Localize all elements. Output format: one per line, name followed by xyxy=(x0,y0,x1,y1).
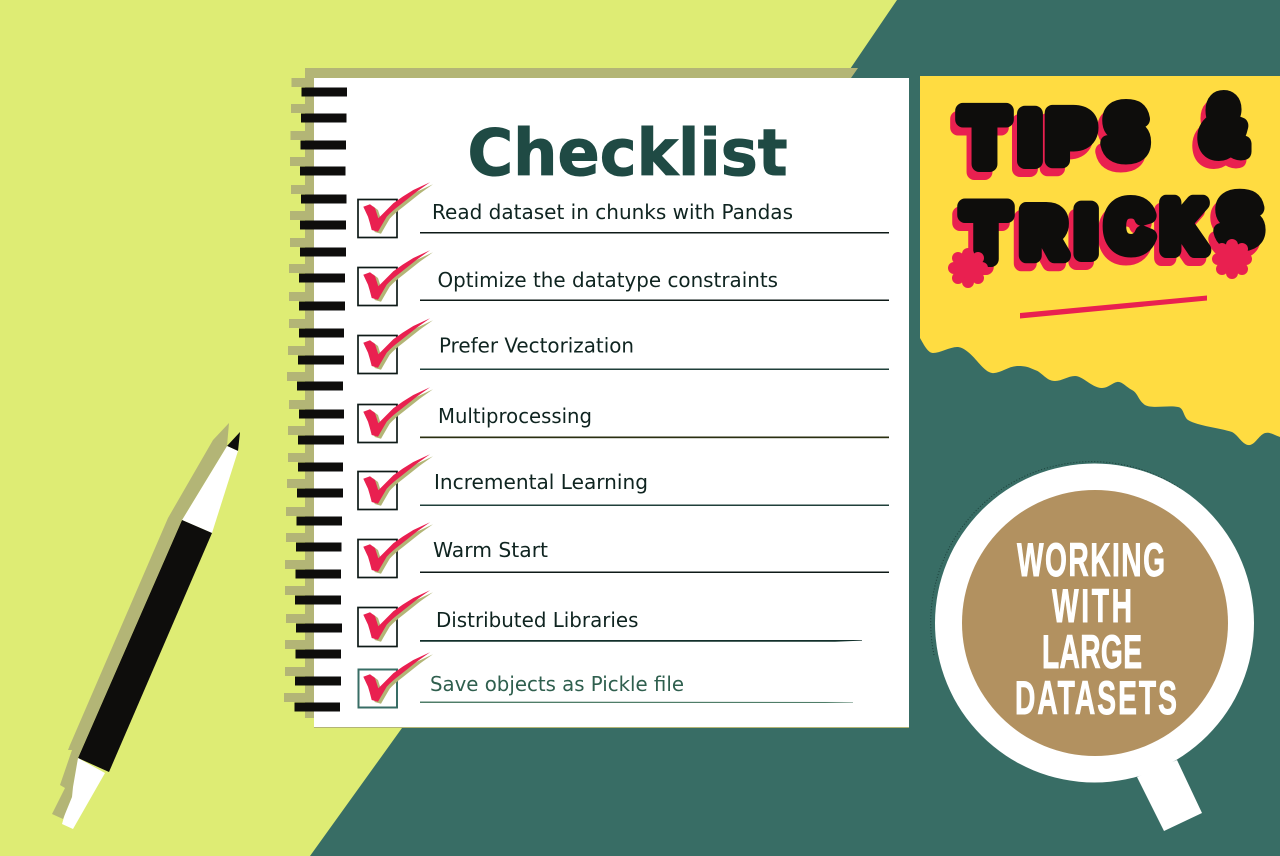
brown lens xyxy=(962,490,1228,756)
torn yellow note panel xyxy=(920,76,1280,445)
checkbox xyxy=(358,608,397,646)
tick shadow xyxy=(366,184,433,234)
item label: Read dataset in chunks with Pandas xyxy=(432,200,793,224)
rule xyxy=(420,702,853,703)
tick xyxy=(363,387,430,437)
item label: Multiprocessing xyxy=(438,404,592,428)
Tips & Tricks title: K xyxy=(1162,188,1205,265)
notebook shadow xyxy=(284,68,858,718)
item label: Warm Start xyxy=(433,538,548,562)
white ring xyxy=(935,464,1254,782)
pen black barrel xyxy=(78,520,212,772)
Tips & Tricks title: I xyxy=(1077,194,1095,268)
rule xyxy=(420,504,889,506)
tick shadow xyxy=(366,320,433,370)
tick xyxy=(363,182,430,232)
item label: Optimize the datatype constraints xyxy=(438,268,778,292)
tick xyxy=(363,250,430,300)
checkbox xyxy=(358,472,397,510)
pen lower white section xyxy=(62,758,105,829)
badge text xyxy=(1015,535,1177,725)
checklist item 7 xyxy=(358,590,862,646)
Tips & Tricks title: I xyxy=(1020,99,1040,176)
Tips & Tricks title xyxy=(962,81,1260,276)
Tips & Tricks title: T xyxy=(962,95,1007,181)
rule xyxy=(420,232,889,234)
item label: Prefer Vectorization xyxy=(439,334,634,358)
magnifying glass badge xyxy=(931,462,1254,831)
badge text: WORKING xyxy=(1017,535,1165,587)
item label: Save objects as Pickle file xyxy=(430,672,684,696)
tick shadow xyxy=(366,654,433,704)
Tips & Tricks title: T xyxy=(964,191,1008,276)
item label: Distributed Libraries xyxy=(436,608,638,632)
rule xyxy=(420,572,889,573)
tick shadow xyxy=(366,252,433,302)
Tips & Tricks title: C xyxy=(1108,189,1152,263)
handle xyxy=(1137,760,1202,831)
checkbox xyxy=(358,670,397,708)
badge text: LARGE xyxy=(1042,627,1142,679)
Tips & Tricks title: P xyxy=(1048,98,1093,175)
checklist heading: Checklist xyxy=(468,117,788,191)
background: teal diagonal field xyxy=(310,0,1280,856)
spiral binding xyxy=(294,88,347,712)
notebook xyxy=(284,68,909,728)
tick xyxy=(363,454,430,504)
checklist item 3 xyxy=(358,318,889,374)
notebook bottom edge xyxy=(314,727,909,728)
red underline xyxy=(1020,296,1207,318)
checkbox xyxy=(358,540,397,578)
checklist item 5 xyxy=(358,454,889,510)
checklist item 1 xyxy=(358,182,889,238)
item label: Incremental Learning xyxy=(434,470,648,494)
pen xyxy=(52,423,240,829)
tick shadow xyxy=(366,389,433,439)
rule xyxy=(420,640,862,642)
tick xyxy=(363,318,430,368)
badge text: DATASETS xyxy=(1015,673,1177,725)
checklist item 6 xyxy=(358,522,889,578)
checkbox xyxy=(358,200,397,238)
checklist item 4 xyxy=(358,387,889,442)
rule xyxy=(420,436,889,438)
tick shadow xyxy=(366,456,433,506)
tick shadow xyxy=(366,592,433,642)
notebook page xyxy=(314,78,909,728)
checklist item 8 xyxy=(358,652,853,708)
checkbox xyxy=(358,268,397,306)
Tips & Tricks title: S xyxy=(1106,93,1146,171)
right flower ornament xyxy=(1212,239,1252,279)
badge text: WITH xyxy=(1052,581,1132,633)
pen tip xyxy=(227,432,240,451)
tick xyxy=(363,652,430,702)
Tips & Tricks title: S xyxy=(1219,183,1260,257)
pen shadow xyxy=(52,423,229,819)
left flower ornament xyxy=(948,248,988,288)
checkbox xyxy=(358,336,397,374)
Tips & Tricks title: R xyxy=(1022,195,1065,269)
checkbox xyxy=(358,404,397,442)
tick xyxy=(363,522,430,572)
rule xyxy=(420,368,889,370)
checklist item 2 xyxy=(358,250,889,306)
tick shadow xyxy=(366,524,433,574)
Tips & Tricks title: & xyxy=(1201,81,1247,169)
pen upper white section xyxy=(182,446,238,533)
tick xyxy=(363,590,430,640)
rule xyxy=(420,300,889,301)
